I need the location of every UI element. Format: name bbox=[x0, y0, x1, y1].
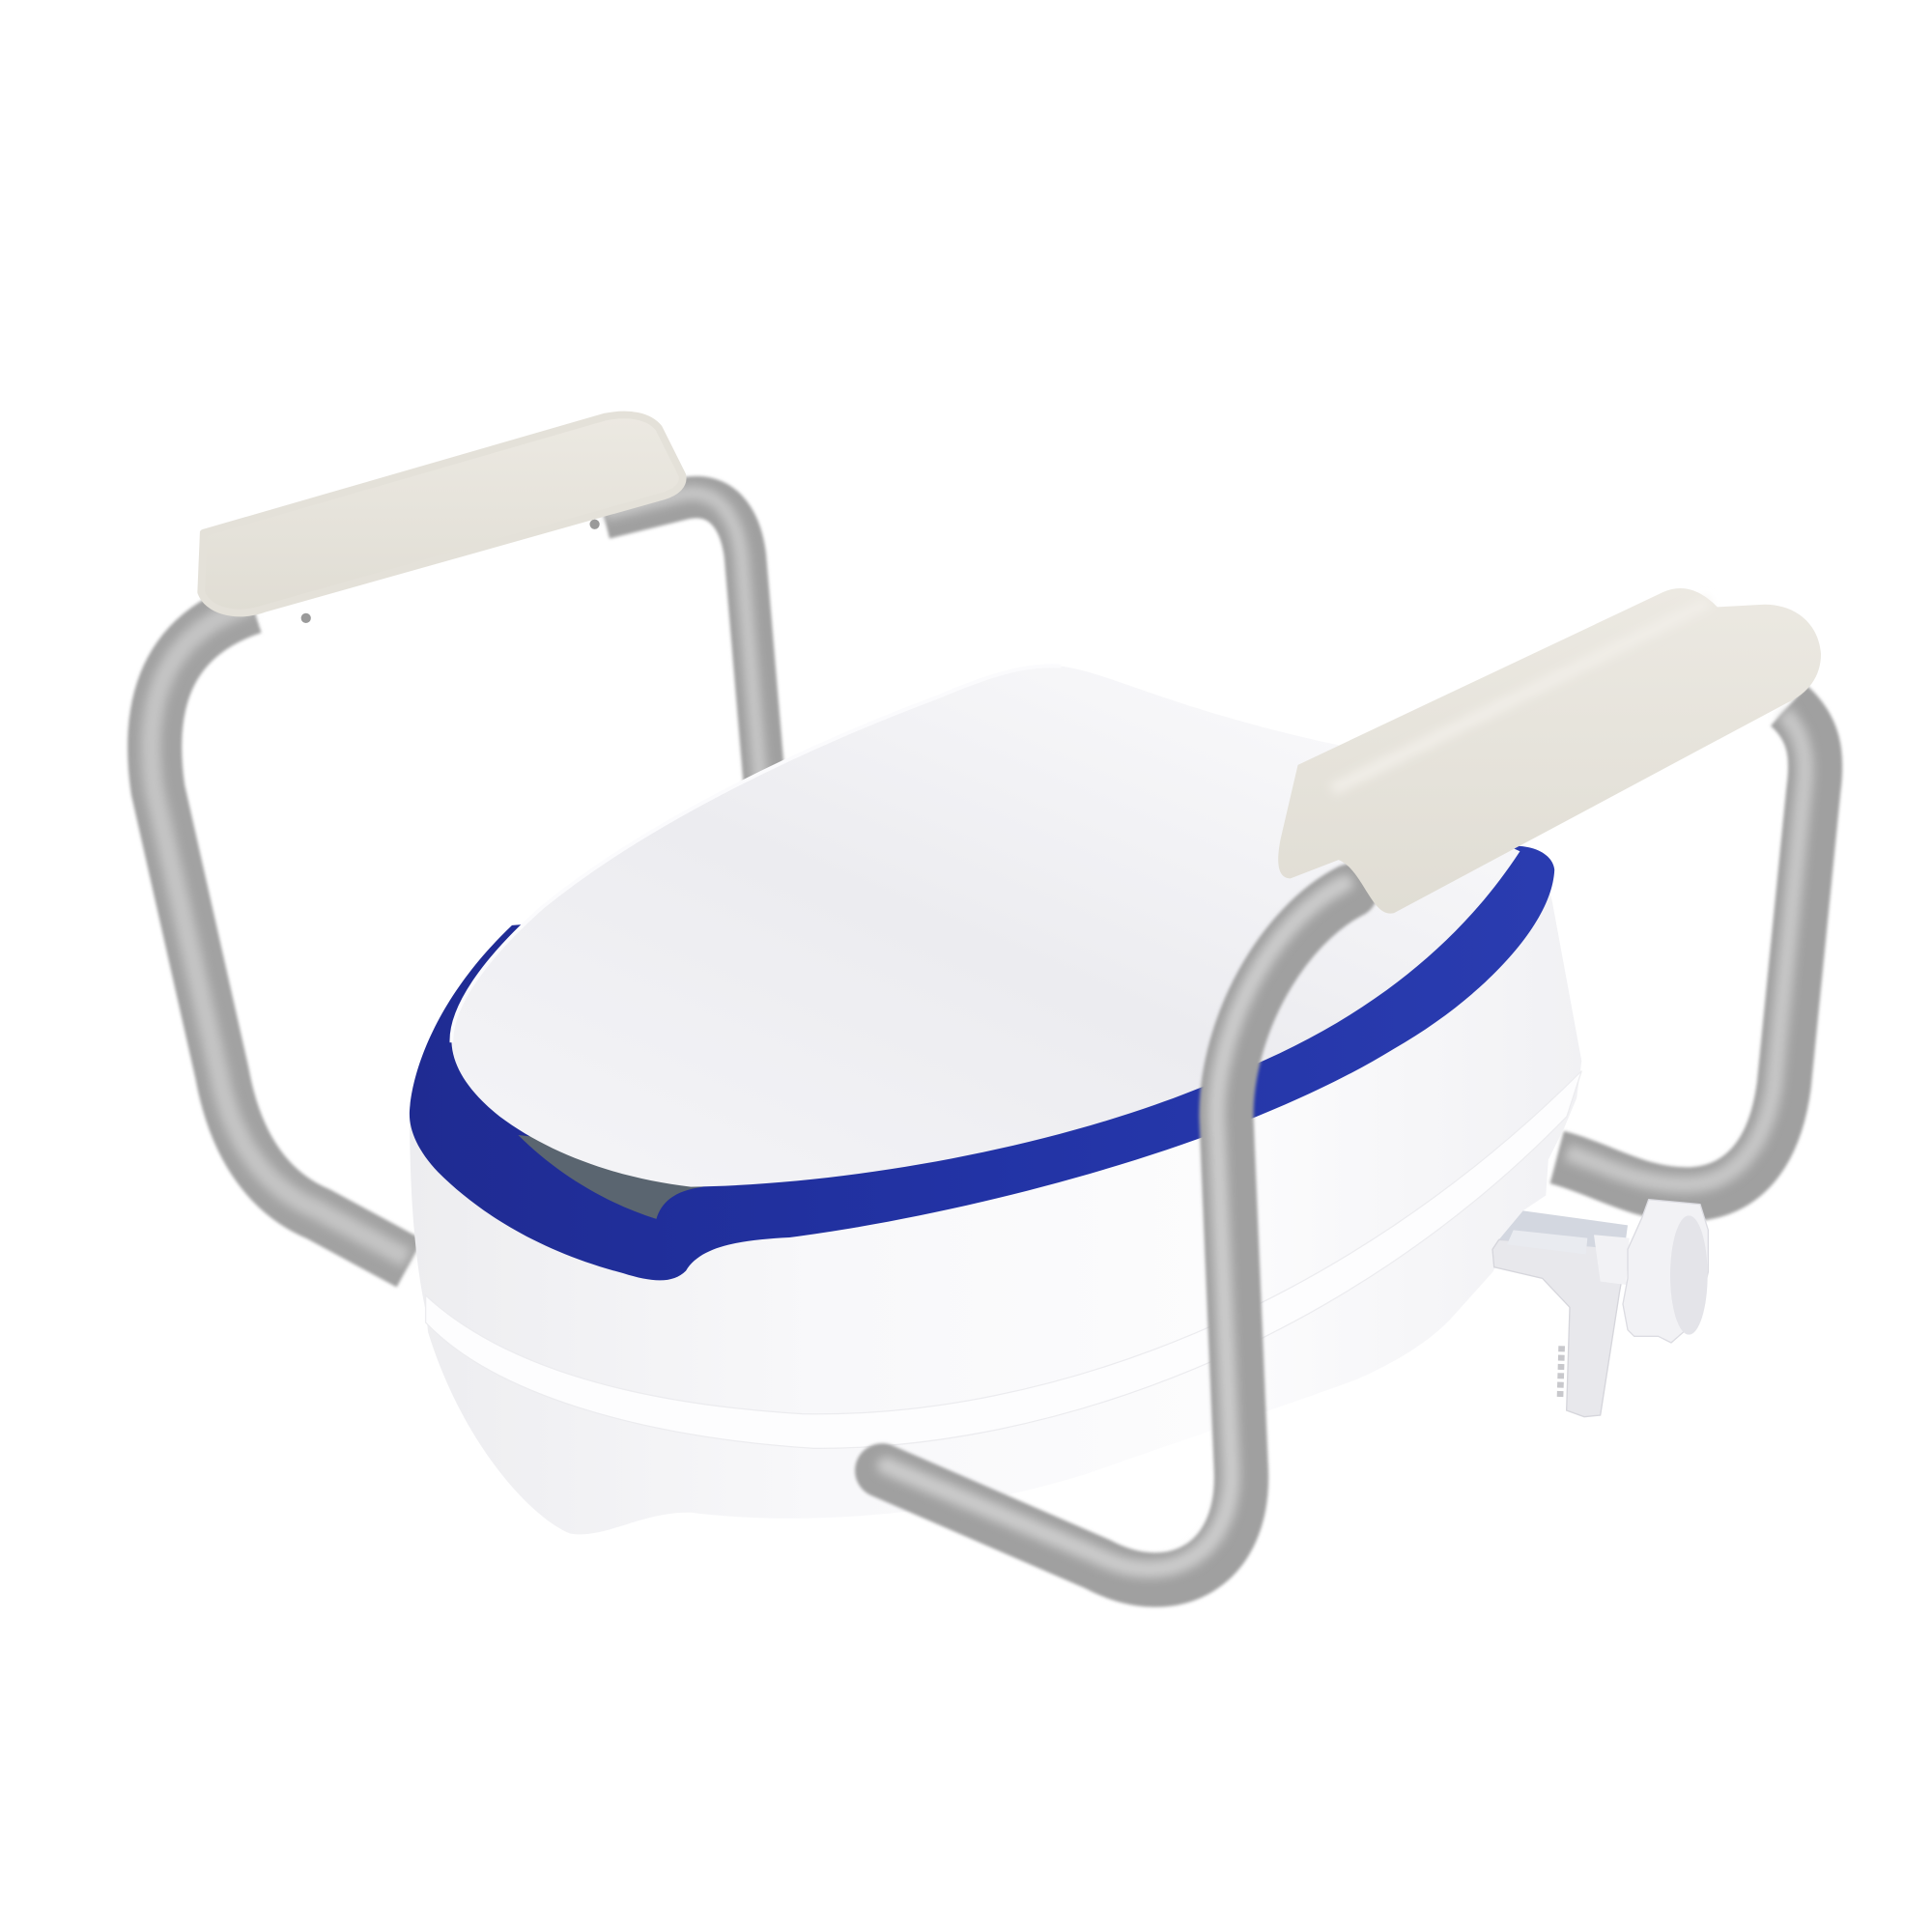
clamp ribs bbox=[1507, 1230, 1587, 1254]
clamp knob bbox=[1623, 1200, 1708, 1343]
dark bowl opening bbox=[518, 1135, 703, 1219]
clamp collar bbox=[1594, 1235, 1630, 1285]
lid edge highlight bbox=[451, 666, 1061, 1042]
right armrest pad bbox=[1278, 588, 1821, 914]
left rear arm frame tube bbox=[151, 493, 765, 1264]
right rear arm frame tube bbox=[1557, 706, 1815, 1194]
clamp teeth bbox=[1560, 1346, 1562, 1398]
left armrest pad bbox=[201, 414, 683, 623]
bolt clamp bbox=[1492, 1200, 1708, 1417]
seat riser base bbox=[410, 864, 1581, 1534]
blue soft seat ring bbox=[410, 846, 1554, 1280]
seat lid bbox=[451, 666, 1520, 1187]
front arm frame tube bbox=[882, 883, 1350, 1580]
clamp thread bbox=[1499, 1210, 1628, 1249]
clamp arm bbox=[1492, 1239, 1626, 1417]
